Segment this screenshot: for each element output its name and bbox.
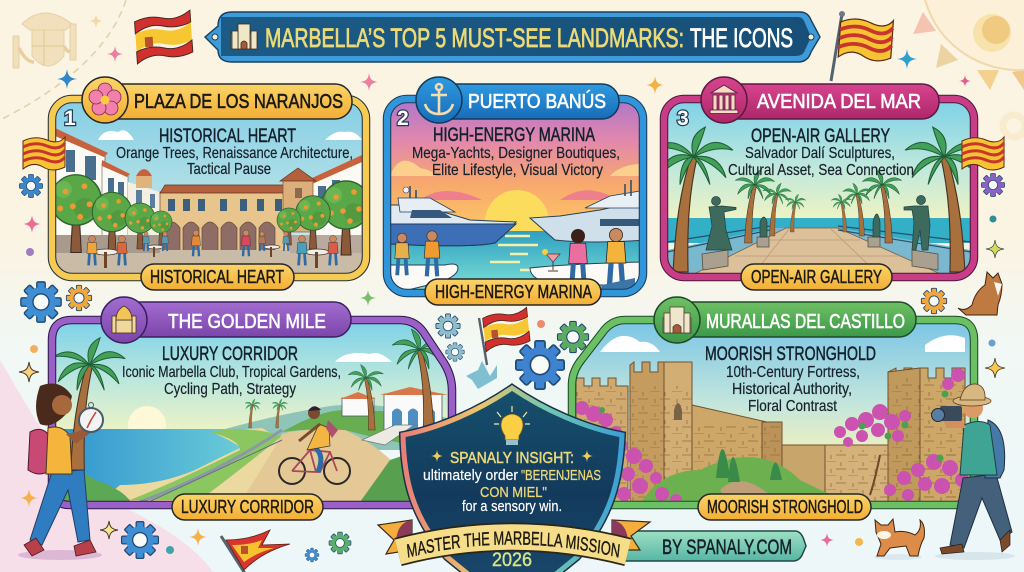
text block xyxy=(705,344,876,415)
flag: Spain bottom xyxy=(221,530,290,572)
text block: Elite Lifestyle, Visual Victory xyxy=(432,162,603,179)
bottom label: HISTORICAL HEART xyxy=(150,267,284,287)
text block: LUXURY CORRIDOR xyxy=(162,344,298,365)
frame xyxy=(572,320,974,505)
insight text: for a sensory win. xyxy=(462,498,562,515)
text block: 10th-Century Fortress, xyxy=(726,364,860,381)
heading text: PLAZA DE LOS NARANJOS xyxy=(134,91,343,113)
bottom label: MOORISH STRONGHOLD xyxy=(707,497,863,517)
frame xyxy=(52,99,366,277)
bottom label xyxy=(172,494,323,520)
flag: Spain top left xyxy=(134,10,193,64)
gears xyxy=(20,174,1004,562)
flag: Catalonia right xyxy=(962,137,1004,170)
heading text: THE GOLDEN MILE xyxy=(168,311,326,333)
icon: mosque xyxy=(101,297,147,343)
character: woman with compass xyxy=(18,384,103,560)
text block: Cycling Path, Strategy xyxy=(164,381,296,398)
flag: Catalonia left xyxy=(23,137,65,170)
badge: by spanaly.com xyxy=(625,531,806,561)
heading pill xyxy=(705,84,939,119)
flag: Catalonia top right with pole xyxy=(831,11,893,81)
heading text: MURALLAS DEL CASTILLO xyxy=(706,311,905,333)
text block: HISTORICAL HEART xyxy=(159,126,296,147)
text block: OPEN-AIR GALLERY xyxy=(751,126,890,147)
bottom label xyxy=(741,264,892,290)
year: 2026 xyxy=(492,550,532,571)
decoration: top right sun and bunting xyxy=(913,0,1024,137)
bottom label xyxy=(425,279,601,305)
scene: coastal path xyxy=(54,323,455,506)
panel 5: Murallas del Castillo xyxy=(570,297,975,520)
text block: Cultural Asset, Sea Connection xyxy=(728,162,914,179)
scene: promenade xyxy=(668,103,970,273)
cyclist xyxy=(279,406,350,484)
bottom label: LUXURY CORRIDOR xyxy=(181,497,314,517)
panel 3: Avenida del Mar xyxy=(655,77,983,290)
icon: light bulb xyxy=(494,406,530,445)
heading pill xyxy=(657,302,916,337)
text block: Orange Trees, Renaissance Architecture, xyxy=(116,145,353,162)
text block: Tactical Pause xyxy=(187,161,271,178)
text block xyxy=(122,344,341,398)
frame xyxy=(52,320,452,505)
bottom label: HIGH-ENERGY MARINA xyxy=(435,282,592,302)
text block xyxy=(412,125,620,179)
sparkles xyxy=(431,450,443,462)
title banner xyxy=(205,12,820,62)
panel 2: Puerto Banús xyxy=(387,77,646,305)
callout: Spanaly insight shield xyxy=(403,388,622,572)
heading text: PUERTO BANÚS xyxy=(468,90,606,113)
scene: plaza xyxy=(51,102,370,276)
scene: marina xyxy=(390,102,646,292)
ribbon: master the Marbella mission xyxy=(376,519,652,566)
icon: anchor xyxy=(416,77,462,123)
character: cat top right xyxy=(958,272,1002,315)
icon: castle xyxy=(231,24,257,49)
number 1: 1 xyxy=(64,107,76,130)
scene: fortress xyxy=(570,323,975,506)
heading text: AVENIDA DEL MAR xyxy=(757,91,921,113)
title banner: THE ICONS xyxy=(690,23,793,53)
icon: temple xyxy=(701,77,747,123)
insight text: SPANALY INSIGHT: xyxy=(450,450,574,467)
decoration: coat of arms xyxy=(13,13,76,68)
heading pill xyxy=(84,84,352,119)
icon: castle xyxy=(654,297,700,343)
insight text: "BERENJENAS xyxy=(521,467,601,484)
text block: HIGH-ENERGY MARINA xyxy=(433,125,595,146)
ribbon text: MASTER THE MARBELLA MISSION xyxy=(406,531,620,558)
text block: Iconic Marbella Club, Tropical Gardens, xyxy=(122,364,341,381)
character: photographer xyxy=(932,384,1015,560)
title text: MARBELLA’S TOP 5 MUST-SEE LANDMARKS: xyxy=(265,23,684,53)
text block: MOORISH STRONGHOLD xyxy=(705,344,876,365)
text block xyxy=(116,126,353,178)
frame xyxy=(664,99,974,277)
number 3: 3 xyxy=(677,107,689,130)
text block: Floral Contrast xyxy=(748,398,837,415)
insight text: CON MIEL" xyxy=(480,484,547,501)
bottom label: OPEN-AIR GALLERY xyxy=(751,267,882,287)
panel 1: Plaza de los Naranjos xyxy=(51,77,370,290)
insight text: ultimately order xyxy=(423,467,518,484)
badge: by spanaly.com: BY SPANALY.COM xyxy=(662,536,792,559)
bottom label xyxy=(698,494,871,520)
bottom label xyxy=(141,264,294,290)
flag: Spain centre with pole and star xyxy=(466,307,531,389)
text block: Historical Authority, xyxy=(732,381,852,398)
text block: Salvador Dalí Sculptures, xyxy=(745,145,895,162)
text block: Mega-Yachts, Designer Boutiques, xyxy=(412,145,620,162)
heading pill xyxy=(105,302,351,337)
heading pill xyxy=(420,84,619,119)
character: cat bottom xyxy=(874,519,924,560)
frame xyxy=(387,99,643,293)
panel 4: The Golden Mile xyxy=(52,297,455,520)
number 2: 2 xyxy=(397,107,409,130)
text block xyxy=(728,126,914,179)
insight text xyxy=(423,450,601,515)
icon: flower xyxy=(82,77,128,123)
